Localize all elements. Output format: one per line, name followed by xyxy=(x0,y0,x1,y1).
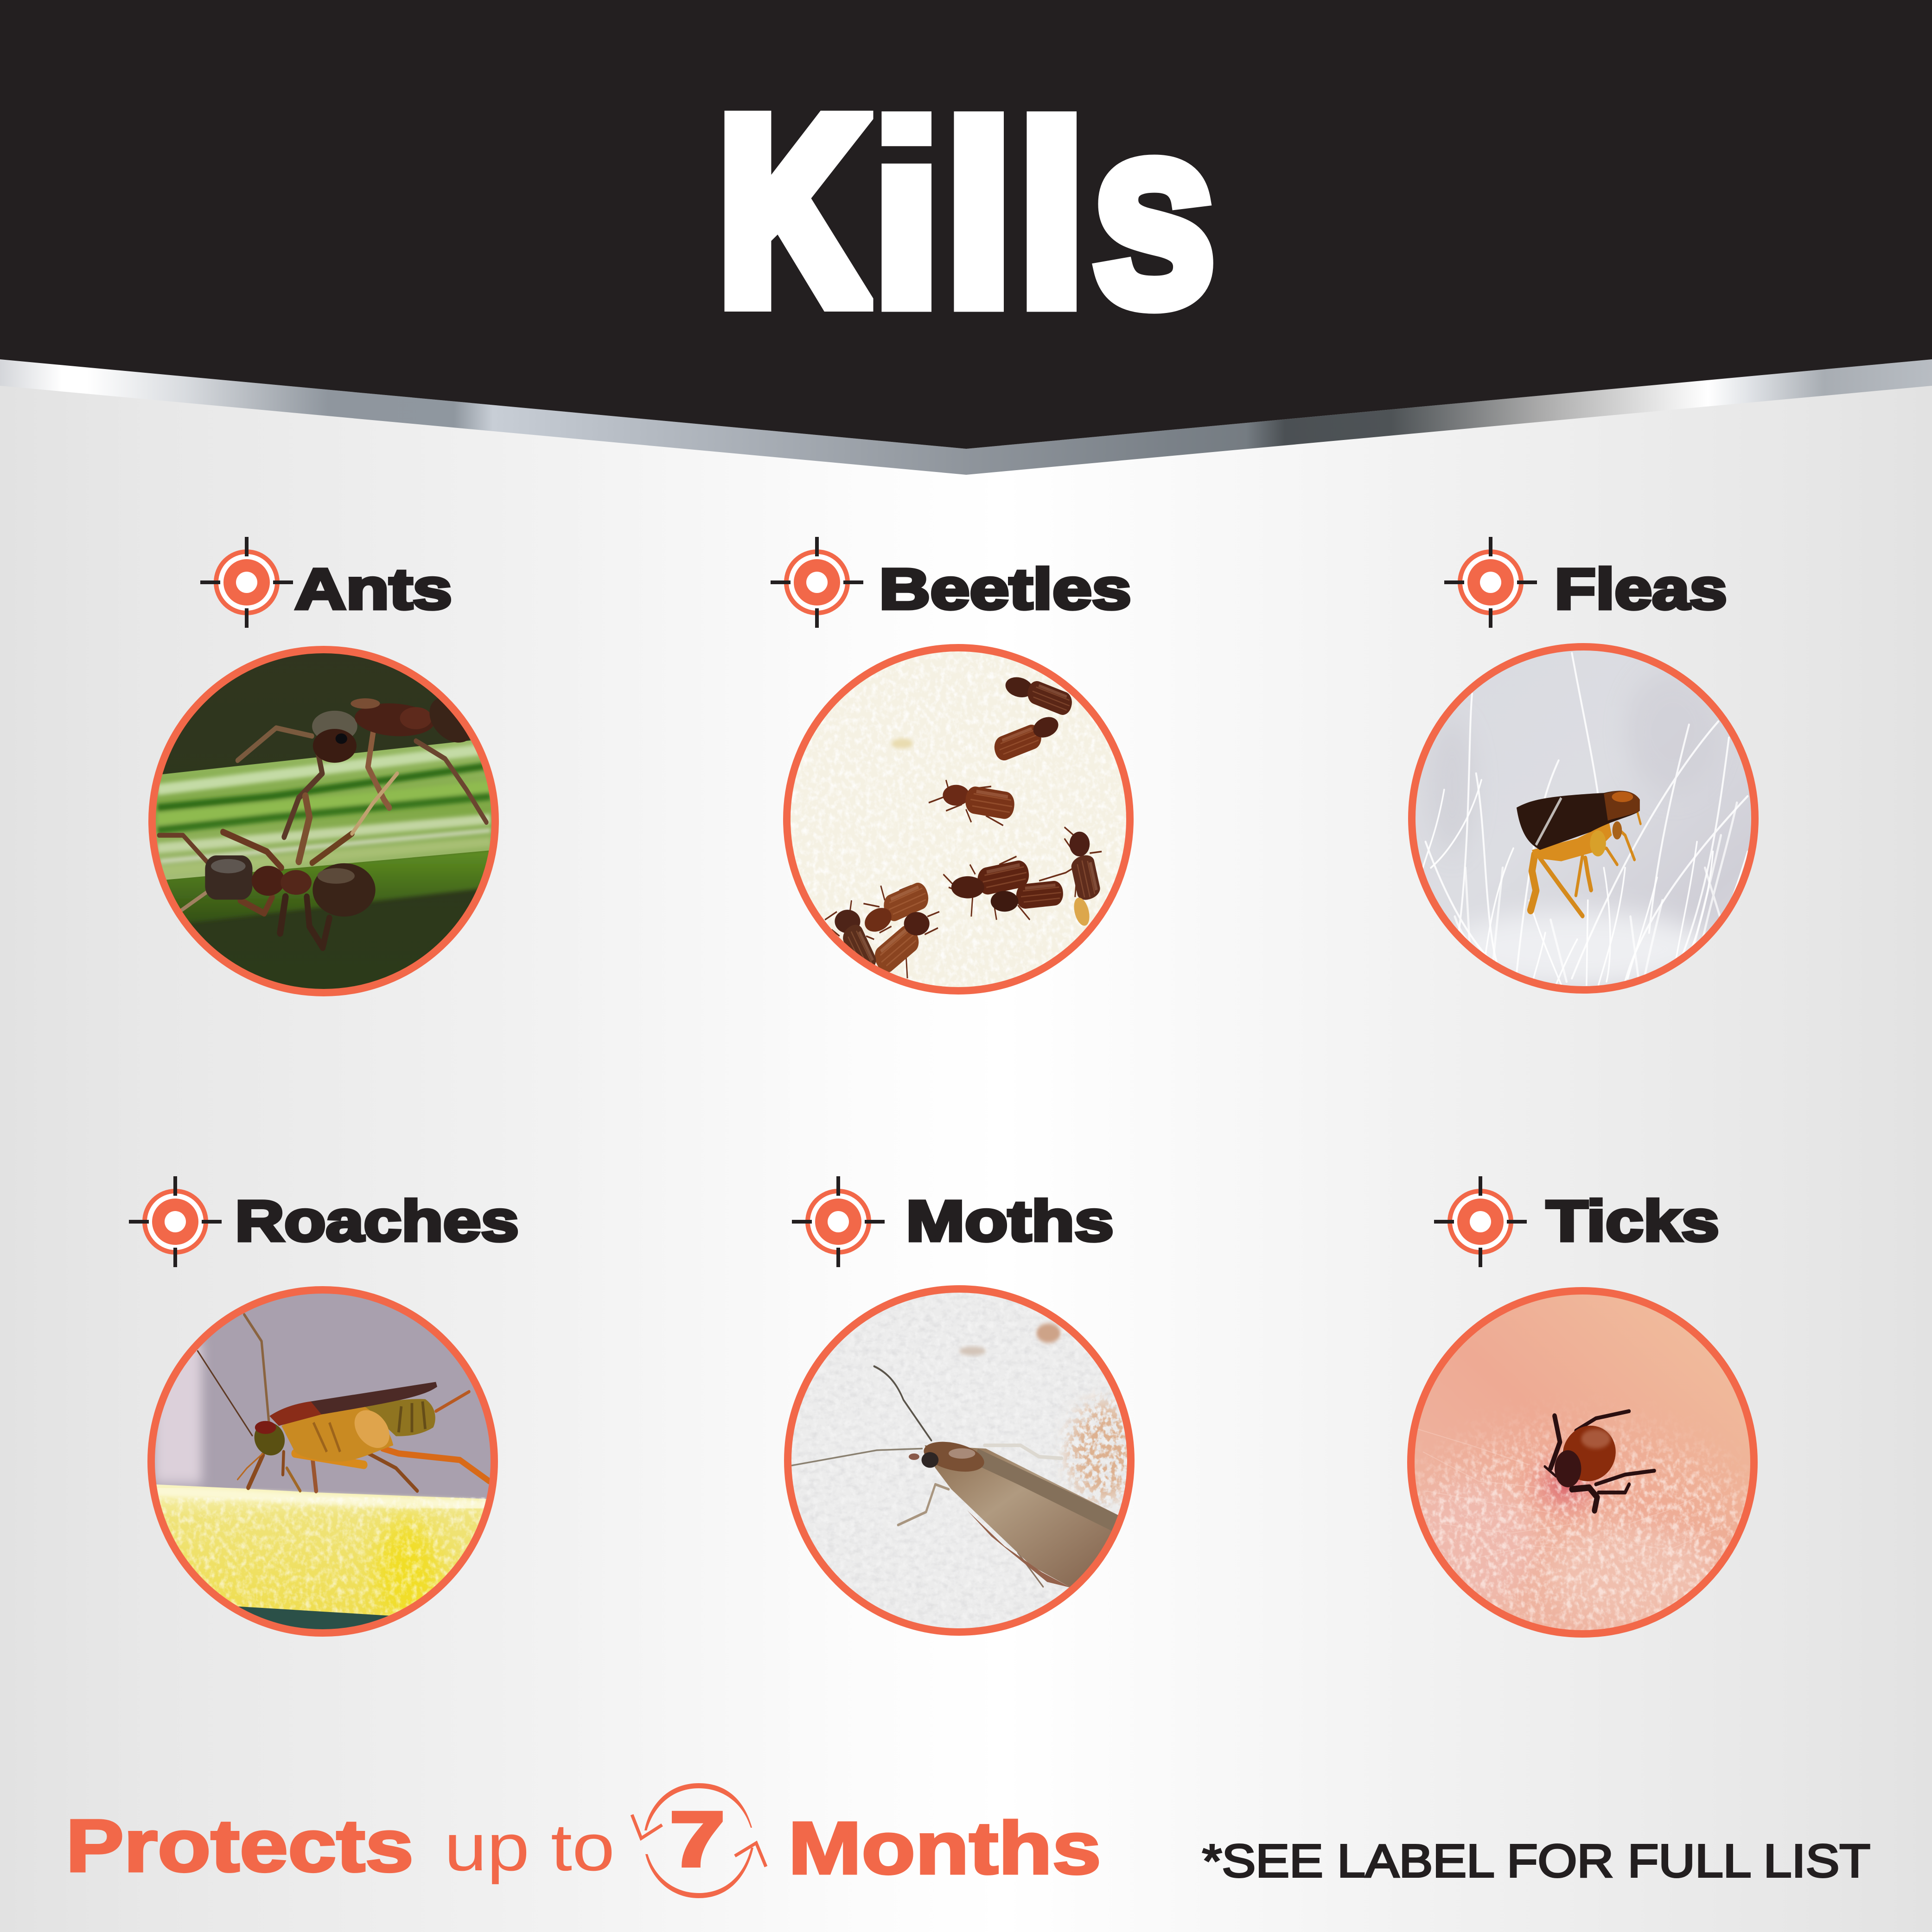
photo: ants on a stem xyxy=(156,653,491,989)
panel: beetles xyxy=(771,537,1134,995)
heading: ticks: Ticks xyxy=(1546,1189,1719,1253)
panel: fleas xyxy=(1408,537,1759,994)
text: Protects: Protects xyxy=(66,1804,414,1887)
icon: target xyxy=(1434,1176,1527,1267)
icon: cycle arrows with 7: 7 xyxy=(670,1797,725,1882)
icon: target xyxy=(1444,537,1537,628)
heading: roaches: Roaches xyxy=(235,1189,519,1253)
photo ring xyxy=(151,1290,494,1633)
text: Months: Months xyxy=(788,1806,1101,1889)
title: i xyxy=(865,68,948,364)
panel: ants xyxy=(139,537,512,1004)
photo: tick on skin xyxy=(1391,1283,1790,1647)
heading: moths: Moths xyxy=(906,1189,1114,1253)
icon: cycle arrows with 7 xyxy=(632,1783,766,1898)
footnote: *SEE LABEL FOR FULL LIST xyxy=(1202,1835,1870,1887)
panel: moths xyxy=(765,1176,1164,1647)
title: l xyxy=(937,68,1020,364)
panel: ticks xyxy=(1391,1176,1790,1647)
footer: protection claim xyxy=(66,1783,1101,1898)
photo ring xyxy=(1411,1291,1754,1634)
heading: fleas: Fleas xyxy=(1555,557,1727,621)
metallic chevron strip xyxy=(0,359,1932,475)
photo ring xyxy=(787,648,1130,991)
text: up to: up to xyxy=(444,1810,615,1885)
photo: beetles on flour xyxy=(791,651,1126,987)
heading: beetles: Beetles xyxy=(879,557,1131,621)
photo ring xyxy=(788,1289,1131,1632)
icon: target xyxy=(129,1176,222,1267)
photo: flea in white hair xyxy=(1416,650,1751,986)
title: s xyxy=(1091,65,1217,361)
icon: target xyxy=(792,1176,885,1267)
panel: roaches xyxy=(129,1176,529,1647)
photo ring xyxy=(1412,647,1755,990)
photo: roach on sponge xyxy=(130,1283,529,1647)
icon: target xyxy=(200,537,293,628)
header band xyxy=(0,0,1932,475)
photo: moth on white surface xyxy=(765,1283,1164,1647)
heading: ants: Ants xyxy=(295,557,452,621)
title: K xyxy=(720,67,865,355)
photo ring xyxy=(152,650,495,993)
title: l xyxy=(1010,68,1093,364)
title xyxy=(0,0,1932,417)
icon: target xyxy=(771,537,863,628)
dark header panel xyxy=(0,0,1932,449)
